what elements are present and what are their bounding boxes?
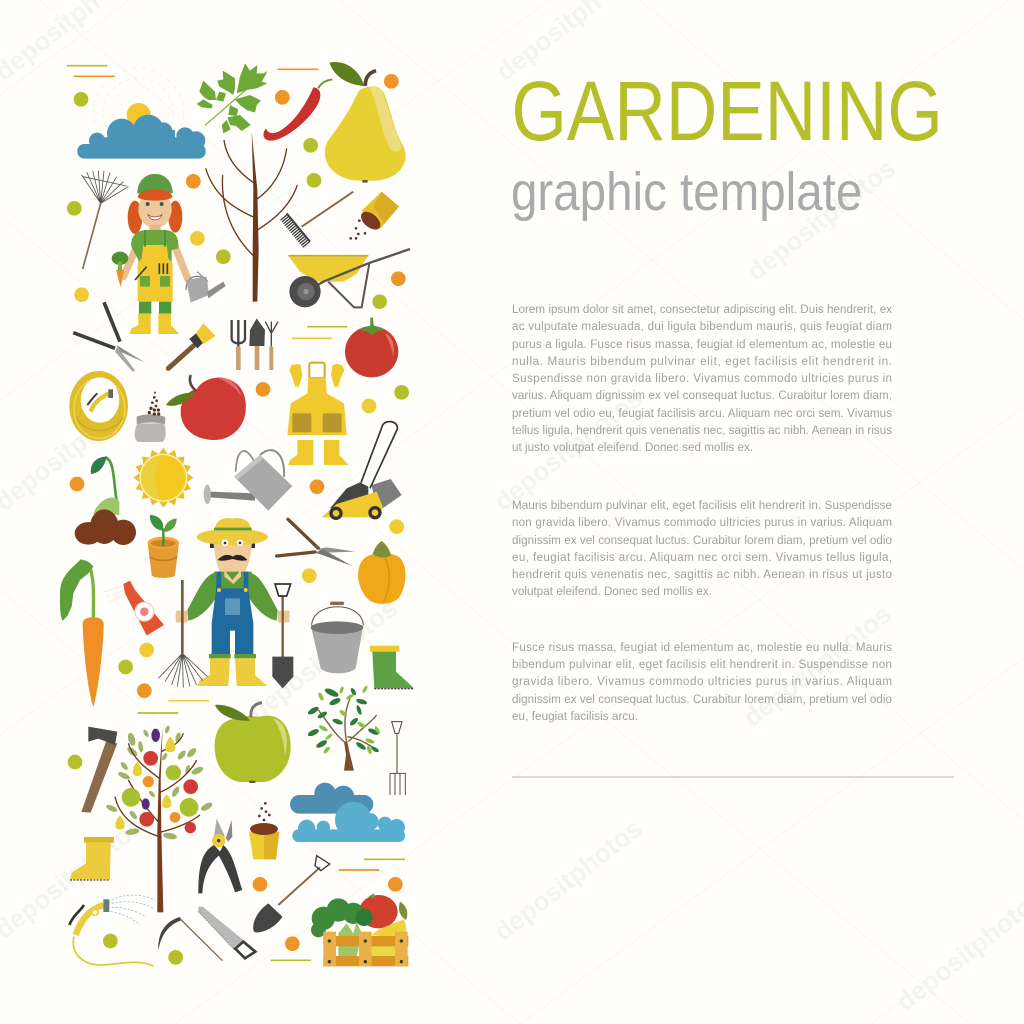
icon: fan rake held by man: [158, 580, 208, 688]
page canvas: depositphotos: [488, 383, 648, 517]
panel: lower garden icons: [68, 683, 408, 966]
icon: pesticide spray bottle: [105, 581, 164, 636]
text block: first paragraph: [512, 302, 892, 454]
panel: middle garden icons: [60, 363, 414, 707]
icon: bright sun: [133, 448, 193, 508]
text block: second paragraph: dignissim ex vel consequat luctus. Curabitur lorem diam, pretium vel odio: [512, 533, 892, 547]
text block: third paragraph: Fusce risus massa, feugiat id elementum ac, molestie eu nulla. Mauris: [512, 640, 892, 654]
text block: first paragraph: nulla. Mauris bibendum pulvinar elit, eget facilisis elit hendrerit in.: [512, 354, 892, 368]
icon: small rake: [284, 192, 353, 246]
icon: pitchfork: [390, 722, 405, 795]
icon: paint brush: [168, 323, 216, 368]
text block: first paragraph: tellus ligula, hendrerit quis venenatis nec, sagittis ac nibh. Aenean in risus: [512, 423, 892, 437]
text block: second paragraph: eu, feugiat facilisis arcu. Aliquam nec orci sem. Vivamus tellus ligula,: [512, 550, 892, 564]
icon: parsley sprig: [197, 63, 267, 133]
icon: garden shovel: [253, 856, 330, 932]
icon: fruit tree: [105, 725, 214, 912]
page canvas: depositphotos: [488, 813, 648, 947]
text block: first paragraph: varius. Aliquam dignissim ex vel consequat luctus. Curabitur lorem diam,: [512, 388, 892, 402]
text block: first paragraph: Lorem ipsum dolor sit amet, consectetur adipiscing elit. Duis hendrerit, ex: [512, 302, 892, 316]
icon: leafy tree: [307, 685, 381, 771]
icon: wheelbarrow: [288, 249, 410, 307]
text block: first paragraph: Suspendisse non gravida libero. Vivamus commodo ultricies purus in: [512, 371, 892, 385]
text block: second paragraph: Mauris bibendum pulvinar elit, eget facilisis elit hendrerit in. Suspendisse: [512, 498, 892, 512]
text block: second paragraph: volutpat eleifend. Donec sed mollis ex.: [512, 584, 712, 598]
icon: yellow pear: [325, 62, 406, 183]
icon: green apple: [215, 703, 291, 783]
text block: third paragraph: gravida libero. Vivamus commodo ultricies purus in varius. Aliquam: [512, 674, 892, 688]
icon: sprouting seed in soil: [75, 457, 136, 545]
icon: metal bucket: [311, 602, 363, 673]
page canvas: depositphotos: [243, 593, 403, 727]
text block: second paragraph: hendrerit quis venenatis nec, sagittis ac nibh. Aenean in risus ut justo: [512, 567, 892, 581]
icon: yellow rubber boot: [70, 837, 114, 880]
text block: third paragraph: [512, 640, 892, 723]
icon: carrot: [60, 559, 104, 707]
text block: first paragraph: pretium vel odio eu, feugiat facilisis arcu. Aliquam nec orci sem. Vivamus: [512, 406, 892, 420]
text block: first paragraph: ut justo volutpat eleifend. Donec sed mollis ex.: [512, 440, 753, 454]
icon: tipped pot with soil: [349, 192, 399, 240]
icon: large watering can: [204, 450, 292, 511]
icon: leaf rake: [82, 171, 128, 269]
icon: hedge trimmer: [277, 519, 355, 566]
icon: two blue clouds: [290, 783, 405, 842]
icon: yellow pot with soil: [249, 802, 279, 859]
icon: scythe: [158, 917, 222, 961]
icon: red apple: [166, 375, 246, 440]
panel: upper garden icons: [67, 62, 410, 377]
icon: lawn mower: [322, 422, 402, 520]
icon: green rubber boot: [370, 646, 414, 689]
icon: orange bell pepper: [358, 541, 405, 604]
icon: seed sack: [135, 392, 166, 442]
text block: first paragraph: purus a ligula. Fusce risus massa, feugiat id elementum ac, molestie eu: [512, 337, 892, 351]
icon: hand fork, trowel and cultivator: [232, 318, 278, 370]
subtitle: graphic template: graphic template: [511, 161, 862, 222]
icon: hedge shears: [73, 302, 145, 372]
icon: potted seedling: [148, 515, 179, 578]
text block: third paragraph: dignissim ex vel consequat luctus. Curabitur lorem diam, pretium vel odio: [512, 692, 892, 706]
text block: third paragraph: eu, feugiat facilisis arcu.: [512, 709, 638, 723]
icon: pruning secateurs: [198, 818, 242, 893]
icon: tomato: [345, 318, 398, 377]
text block: second paragraph: non gravida libero. Vivamus commodo ultricies purus in varius. Aliquam: [512, 515, 892, 529]
page canvas: depositphotos: [737, 599, 897, 733]
icon: spade held by man: [272, 584, 293, 688]
icon: red chili pepper: [263, 79, 332, 141]
icon: axe: [81, 727, 117, 813]
title: GARDENING: GARDENING: [512, 64, 943, 158]
icon: sun behind blue cloud: [77, 68, 206, 159]
text block: first paragraph: ac vulputate malesuada, dui ligula bibendum mauris, quis feugiat diam: [512, 319, 892, 333]
icon: man gardener with moustache: [176, 518, 290, 686]
icon: woman gardener: [112, 174, 188, 334]
text block: third paragraph: bibendum pulvinar elit, eget facilisis elit hendrerit in. Suspendisse non: [512, 657, 892, 671]
icon: hand saw: [198, 907, 255, 958]
icon: small watering can: [186, 272, 226, 303]
icon: bare young tree: [206, 132, 297, 302]
icon: coiled garden hose: [69, 371, 128, 441]
icon: crate of vegetables: [311, 893, 408, 966]
text block: second paragraph: [512, 498, 892, 598]
icon: spray nozzle and hose: [69, 895, 155, 966]
icon: yellow apron, gloves and boots: [287, 363, 349, 465]
page canvas: depositphotos: [741, 153, 901, 287]
